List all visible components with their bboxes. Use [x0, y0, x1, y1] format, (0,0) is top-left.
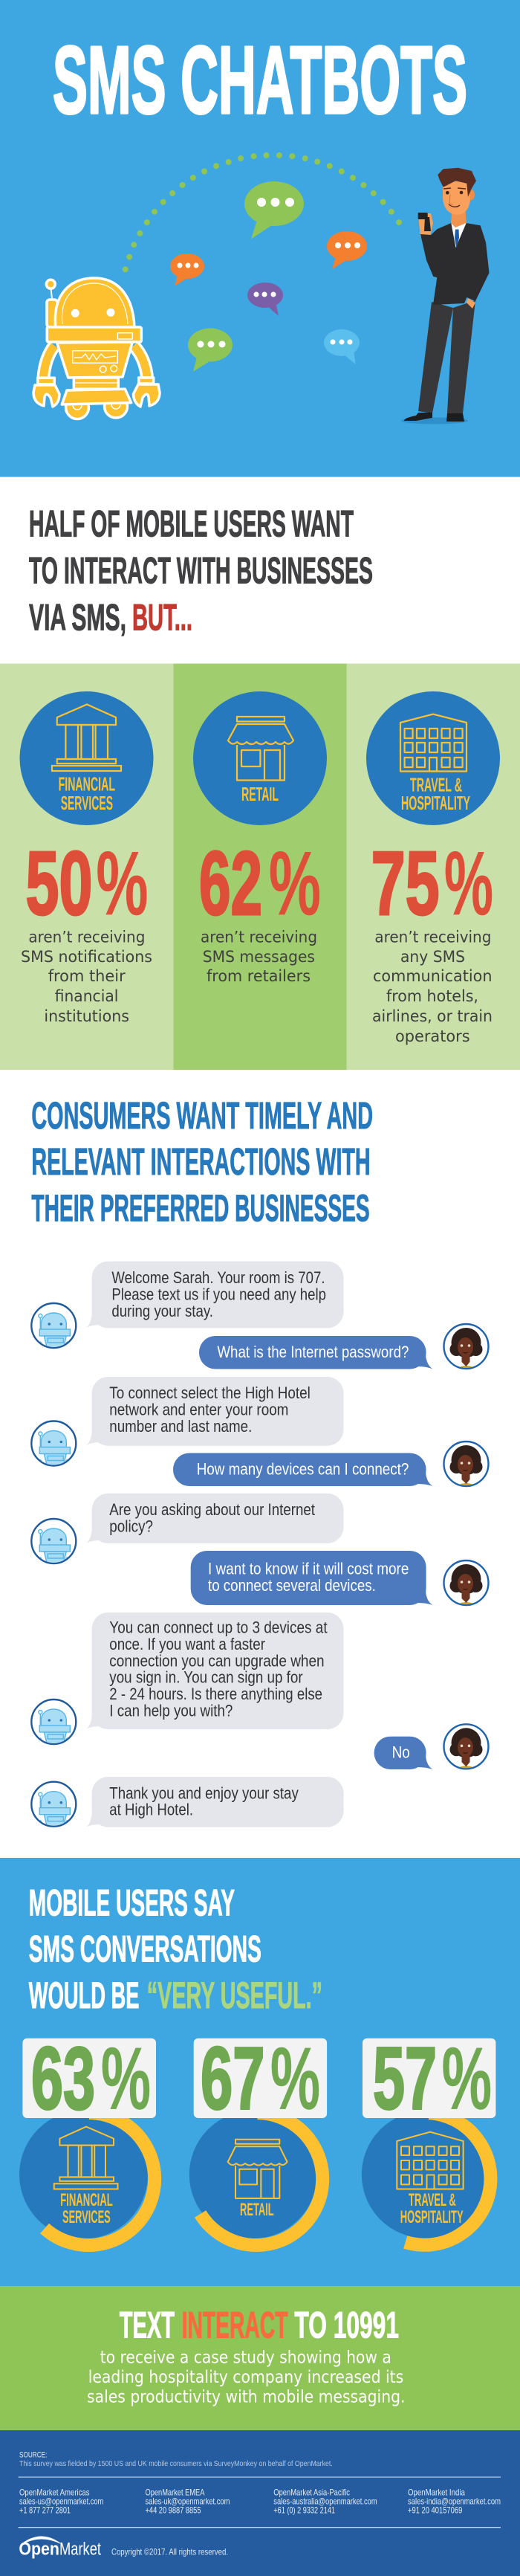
bot message 2: network and enter your room [109, 1401, 288, 1418]
bot message 1: during your stay. [111, 1302, 213, 1320]
speech bubble: small green [188, 329, 233, 372]
bot message 1 [31, 1262, 344, 1349]
contacts: EMEA: +44 20 9887 8855 [146, 2505, 201, 2516]
icon label: TRAVEL & [410, 774, 462, 796]
heading: mobile users say [29, 1882, 322, 2016]
user message 1: What is the Internet password? [217, 1343, 409, 1361]
stat card: financial services 63%: FINANCIAL [60, 2190, 113, 2210]
source note [19, 2451, 333, 2468]
icon label: SERVICES [61, 792, 113, 814]
bot message 1: Welcome Sarah. Your room is 707. [111, 1268, 325, 1287]
icon: hotel [397, 2132, 464, 2189]
description: from retailers [207, 967, 311, 986]
contacts: Americas: +1 877 277 2801 [19, 2505, 71, 2516]
user message 1 [199, 1324, 489, 1372]
description: aren’t receiving [28, 929, 145, 947]
logo: OpenMarket: Open [19, 2540, 59, 2560]
bot message 3: policy? [109, 1517, 153, 1536]
description: financial [55, 987, 118, 1006]
stat card: financial services 63%: % [101, 2029, 151, 2128]
stat card: retail 67%: % [270, 2029, 320, 2128]
icon: storefront [228, 2140, 287, 2198]
bot message 2: To connect select the High Hotel [109, 1384, 311, 1402]
panel: call to action [0, 2286, 520, 2430]
stat: 50%: % [97, 833, 149, 934]
speech bubble: purple [247, 283, 283, 316]
bot message 4: 2 - 24 hours. Is there anything else [109, 1685, 322, 1703]
icon: storefront [228, 717, 293, 781]
user message 3: I want to know if it will cost more [208, 1559, 409, 1578]
column: travel and hospitality [366, 691, 500, 1046]
icon label: FINANCIAL [59, 773, 115, 795]
bot message 5 [31, 1777, 344, 1828]
call to action headline: TO 10991 [294, 2305, 399, 2346]
bot message 3 [31, 1494, 344, 1565]
user message 4: No [392, 1743, 410, 1761]
bot message 2: number and last name. [109, 1417, 252, 1436]
bot message 5: at High Hotel. [109, 1801, 193, 1819]
panel: chat conversation [31, 1262, 489, 1828]
dotted arc [123, 152, 402, 272]
contacts: India [408, 2488, 501, 2516]
heading: half of mobile users [29, 503, 373, 638]
user message 3 [191, 1551, 489, 1608]
contacts: India: +91 20 40157069 [408, 2505, 463, 2516]
contacts: Asia-Pacific: +61 (0) 2 9332 2141 [273, 2505, 335, 2516]
stat card: travel and hospitality 57%: HOSPITALITY [400, 2207, 464, 2227]
source note: This survey was fielded by 1500 US and UK mobile consumers via SurveyMonkey on behalf of OpenMarket. [19, 2459, 333, 2468]
description: SMS notifications [21, 948, 152, 966]
contacts: Asia-Pacific: sales-australia@openmarket.com [273, 2496, 377, 2507]
stat card: financial services 63%: SERVICES [62, 2207, 111, 2227]
stat card: travel and hospitality 57%: TRAVEL & [409, 2190, 456, 2210]
bot message 4: I can help you with? [109, 1701, 233, 1720]
contacts: Americas: sales-us@openmarket.com [19, 2496, 103, 2507]
contacts: India: OpenMarket India [408, 2488, 465, 2498]
bot message 4 [31, 1613, 344, 1746]
description: aren’t receiving [201, 929, 317, 947]
speech bubble: light blue [324, 329, 360, 364]
heading: mobile users say: “VERY USEFUL.” [147, 1975, 322, 2016]
call to action description: leading hospitality company increased its [88, 2366, 403, 2387]
call to action description [87, 2346, 406, 2407]
stat card: travel and hospitality 57% [362, 2029, 495, 2245]
call to action headline: TEXT [120, 2305, 175, 2346]
stat card: financial services 63% [19, 2029, 156, 2245]
stat: 62%: 62 [199, 833, 262, 934]
copyright: Copyright ©2017. All rights reserved. [111, 2547, 228, 2557]
heading: mobile users say: SMS CONVERSATIONS [29, 1928, 261, 1970]
panel: usefulness stats [0, 1858, 520, 2286]
illustration: businessman with phone [401, 168, 489, 424]
description: aren’t receiving [374, 929, 491, 947]
stat card: retail 67% [189, 2029, 327, 2245]
description: airlines, or train [372, 1007, 493, 1026]
icon label: RETAIL [241, 783, 279, 805]
bot message 4: connection you can upgrade when [109, 1651, 325, 1670]
contacts: EMEA: sales-uk@openmarket.com [146, 2496, 230, 2507]
contacts: Asia-Pacific [273, 2488, 377, 2516]
description: communication [373, 967, 492, 986]
stat card: financial services 63%: 63 [31, 2029, 95, 2128]
description: any SMS [400, 948, 465, 966]
speech bubble: large green [244, 181, 304, 239]
call to action headline [120, 2305, 399, 2346]
heading: mobile users say: MOBILE USERS SAY [29, 1882, 235, 1923]
bot message 2 [31, 1377, 344, 1468]
description [372, 929, 493, 1046]
stat card: travel and hospitality 57%: % [442, 2029, 492, 2128]
stat: 62%: % [269, 833, 321, 934]
icon: hotel [400, 714, 467, 772]
contacts: EMEA [146, 2488, 230, 2516]
column: financial services [19, 691, 153, 1026]
user message 4 [374, 1724, 489, 1772]
description: from hotels, [386, 987, 478, 1006]
description [201, 929, 317, 986]
speech bubble: orange right [327, 231, 367, 269]
heading: half of mobile users: BUT... [132, 596, 192, 638]
heading: half of mobile users: VIA SMS, [29, 596, 126, 638]
icon label [59, 773, 115, 814]
logo: OpenMarket: Market [59, 2540, 101, 2560]
user message 3: to connect several devices. [208, 1576, 376, 1595]
description: from their [48, 967, 126, 986]
contacts: Asia-Pacific: OpenMarket Asia-Pacific [273, 2488, 350, 2498]
icon: bank [54, 2127, 117, 2189]
heading: consumers want timely [31, 1094, 373, 1229]
logo: OpenMarket [19, 2537, 101, 2560]
stat card: retail 67%: RETAIL [240, 2200, 274, 2220]
column: retail [193, 691, 327, 986]
user message 2: How many devices can I connect? [197, 1460, 409, 1478]
call to action description: to receive a case study showing how a [100, 2346, 391, 2367]
source note: SOURCE: [19, 2451, 47, 2460]
contacts: EMEA: OpenMarket EMEA [146, 2488, 204, 2498]
icon label [401, 774, 470, 814]
user message 2 [173, 1442, 489, 1489]
description: institutions [44, 1007, 129, 1026]
bot message 3: Are you asking about our Internet [109, 1500, 315, 1519]
contacts: Americas [19, 2488, 103, 2516]
call to action headline: INTERACT [182, 2305, 288, 2346]
icon: robot [33, 278, 160, 419]
panel: three sector columns [0, 664, 520, 1070]
heading: mobile users say: WOULD BE [29, 1975, 139, 2016]
icon: bank [52, 705, 121, 771]
bot message 4: You can connect up to 3 devices at [109, 1618, 328, 1637]
stat: 50%: 50 [25, 833, 92, 934]
contacts: Americas: OpenMarket Americas [19, 2488, 89, 2498]
description: SMS messages [203, 948, 315, 966]
stat: 75%: 75 [371, 833, 440, 934]
panel: footer [0, 2430, 520, 2576]
stat card: travel and hospitality 57%: 57 [373, 2029, 437, 2128]
bot message 1: Please text us if you need any help [111, 1285, 326, 1304]
panel: hero [0, 0, 520, 477]
bot message 4: you sign in. You can sign up for [109, 1668, 303, 1687]
bot message 5: Thank you and enjoy your stay [109, 1783, 299, 1802]
stat card: retail 67%: 67 [201, 2029, 264, 2128]
description: operators [395, 1027, 470, 1046]
call to action description: sales productivity with mobile messaging. [87, 2386, 406, 2407]
description [21, 929, 152, 1026]
speech bubble: orange left [170, 254, 204, 286]
bot message 4: once. If you want a faster [109, 1635, 265, 1653]
